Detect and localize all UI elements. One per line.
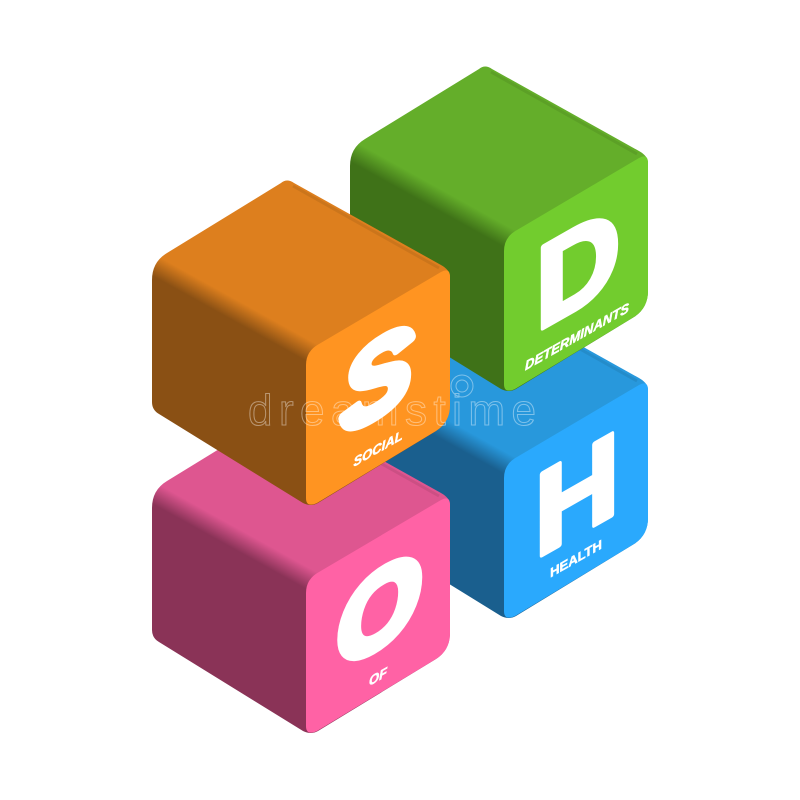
letter O: O bbox=[336, 526, 420, 694]
letter D: D bbox=[535, 177, 621, 357]
cube: H Health bbox=[350, 294, 648, 618]
label HEALTH: HEALTH bbox=[550, 536, 602, 581]
letter H: H bbox=[534, 404, 620, 584]
label DETERMINANTS: DETERMINANTS bbox=[525, 299, 630, 373]
watermark: dreamstime bbox=[248, 386, 536, 435]
blue cube body bbox=[350, 294, 648, 618]
cube: S Social bbox=[152, 180, 450, 505]
label SOCIAL: SOCIAL bbox=[353, 427, 403, 470]
pink cube body bbox=[152, 408, 450, 733]
orange cube body bbox=[152, 180, 450, 505]
letter S: S bbox=[341, 298, 413, 460]
cube: O Of bbox=[152, 408, 450, 733]
cube: D Determinants bbox=[350, 66, 648, 391]
green cube body bbox=[350, 66, 648, 391]
label OF: OF bbox=[369, 664, 387, 689]
